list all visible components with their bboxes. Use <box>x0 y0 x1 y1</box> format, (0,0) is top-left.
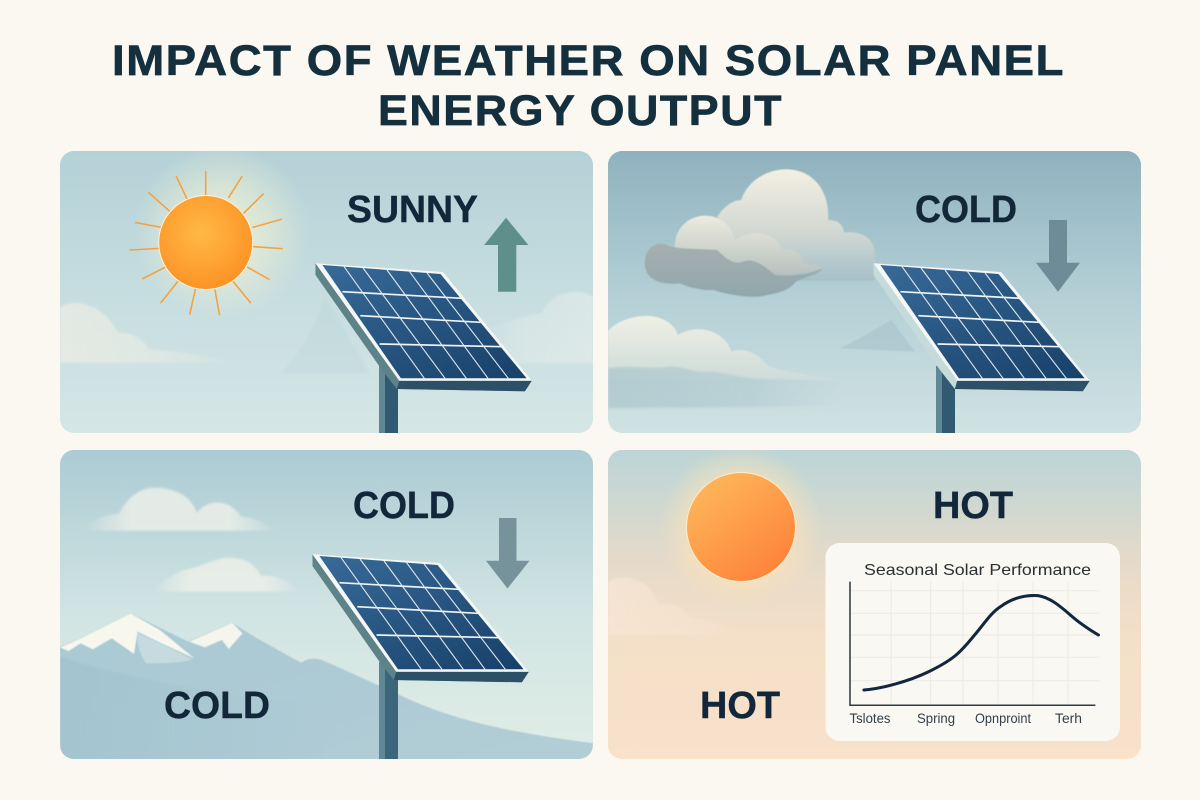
title <box>112 37 1065 135</box>
line chart: seasonal solar performance: Terh <box>1055 710 1082 726</box>
label: sunny: SUNNY <box>347 189 478 231</box>
line chart: seasonal solar performance: Opnproint <box>975 710 1031 726</box>
background scenery: clouds and hill <box>60 292 593 373</box>
arrow: up <box>484 218 528 292</box>
clouds and snowy mountains <box>60 488 593 760</box>
storm clouds <box>608 169 915 408</box>
icon: sun <box>670 452 812 586</box>
arrow: down <box>486 518 530 588</box>
icon: sun with rays <box>129 155 297 316</box>
line chart: seasonal solar performance: Seasonal Solar Performance <box>864 562 1091 579</box>
panel: sunny <box>60 144 593 434</box>
cloud <box>609 578 646 634</box>
label: hot lower: HOT <box>700 685 780 727</box>
line chart: seasonal solar performance <box>826 543 1120 741</box>
line chart: seasonal solar performance: Tslotes <box>850 710 890 726</box>
solar panel <box>316 263 532 434</box>
label: cold: COLD <box>915 189 1017 231</box>
title: IMPACT OF WEATHER ON SOLAR PANEL <box>112 37 1065 85</box>
arrow: down <box>1036 220 1080 292</box>
panel: cold mountains <box>60 450 593 760</box>
label: cold upper: COLD <box>353 485 455 527</box>
title: ENERGY OUTPUT <box>378 87 783 135</box>
label: hot upper: HOT <box>933 485 1013 527</box>
panel: cloudy <box>608 151 1141 434</box>
panel: hot <box>608 445 1141 759</box>
solar panel <box>874 263 1090 434</box>
line chart: seasonal solar performance: Spring <box>917 710 955 726</box>
solar panel <box>312 554 529 760</box>
label: cold lower: COLD <box>164 685 270 727</box>
